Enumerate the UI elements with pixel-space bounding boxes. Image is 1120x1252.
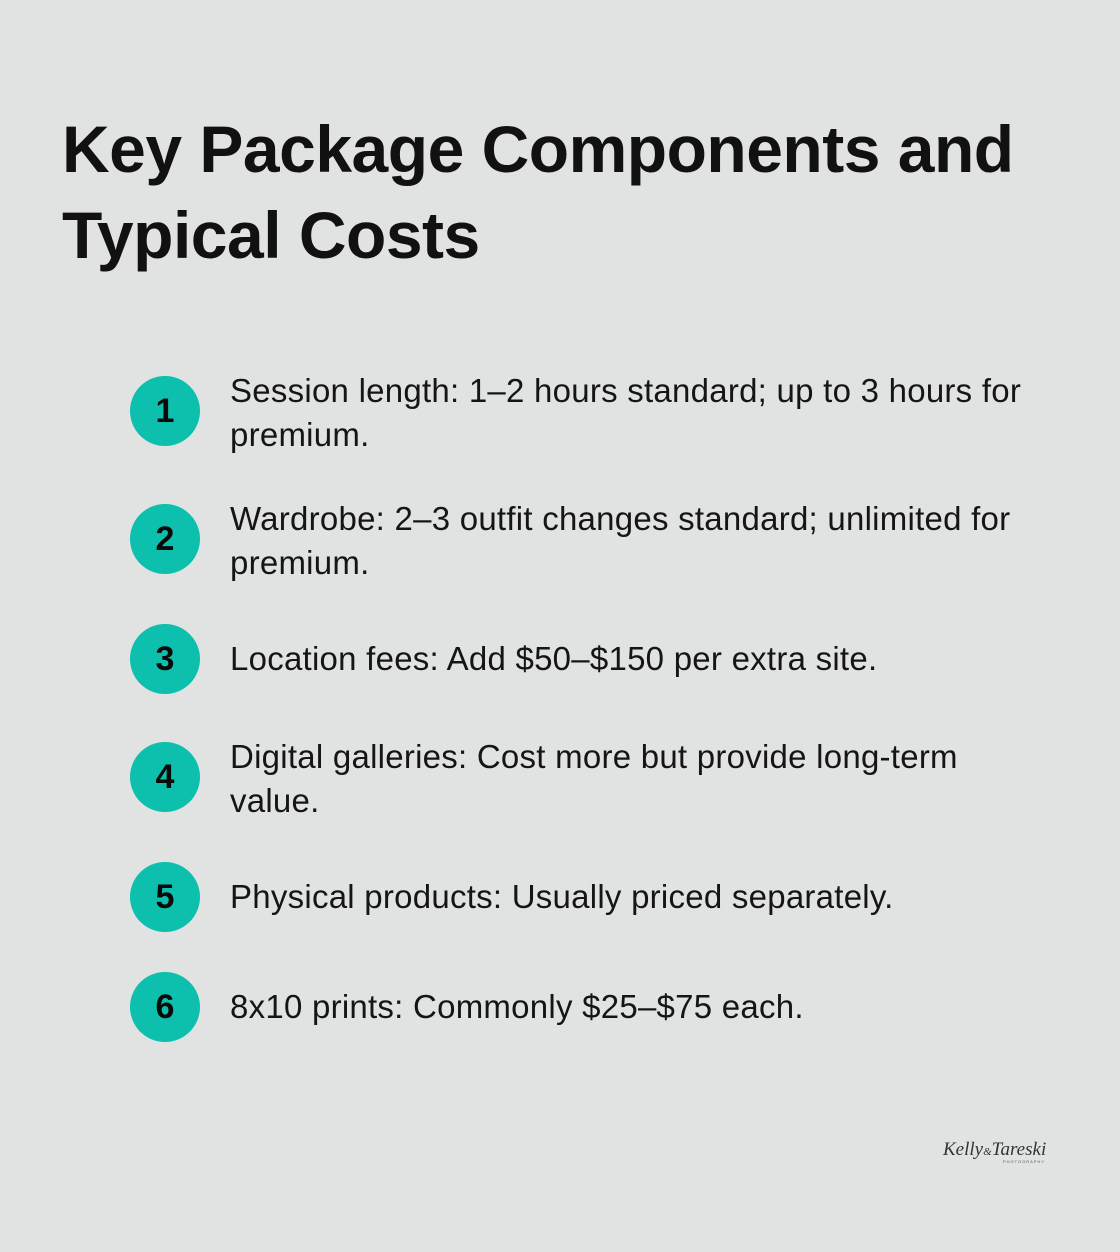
item 6 [130,972,804,1042]
title: Key Package Components and [62,112,1014,186]
badge 4: 4 [156,758,174,796]
logo signature: Kelly&Tareski [943,1139,1046,1160]
text 1 [230,372,1021,453]
badge 5: 5 [156,878,174,916]
item 1 [130,372,1021,453]
badge 5 [130,862,200,932]
logo signature: PHOTOGRAPHY [1003,1159,1045,1164]
badge 4 [130,742,200,812]
text 4: value. [230,782,320,819]
text 1: premium. [230,416,370,453]
text 1: Session length: 1–2 hours standard; up to 3 hours for [230,372,1021,409]
text 3: Location fees: Add $50–$150 per extra site. [230,640,877,677]
badge 2: 2 [156,520,174,558]
title: Typical Costs [62,198,480,272]
badge 6 [130,972,200,1042]
title [62,112,1014,272]
item 2 [130,500,1010,581]
item 3 [130,624,877,694]
text 4 [230,738,958,819]
badge 3: 3 [156,640,174,678]
item 5 [130,862,894,932]
text 2 [230,500,1010,581]
text 6: 8x10 prints: Commonly $25–$75 each. [230,988,804,1025]
badge 1 [130,376,200,446]
badge 6: 6 [156,988,174,1026]
badge 3 [130,624,200,694]
badge 1: 1 [156,392,174,430]
text 2: premium. [230,544,370,581]
item 4 [130,738,958,819]
text 5: Physical products: Usually priced separately. [230,878,894,915]
text 2: Wardrobe: 2–3 outfit changes standard; unlimited for [230,500,1010,537]
text 4: Digital galleries: Cost more but provide long-term [230,738,958,775]
badge 2 [130,504,200,574]
